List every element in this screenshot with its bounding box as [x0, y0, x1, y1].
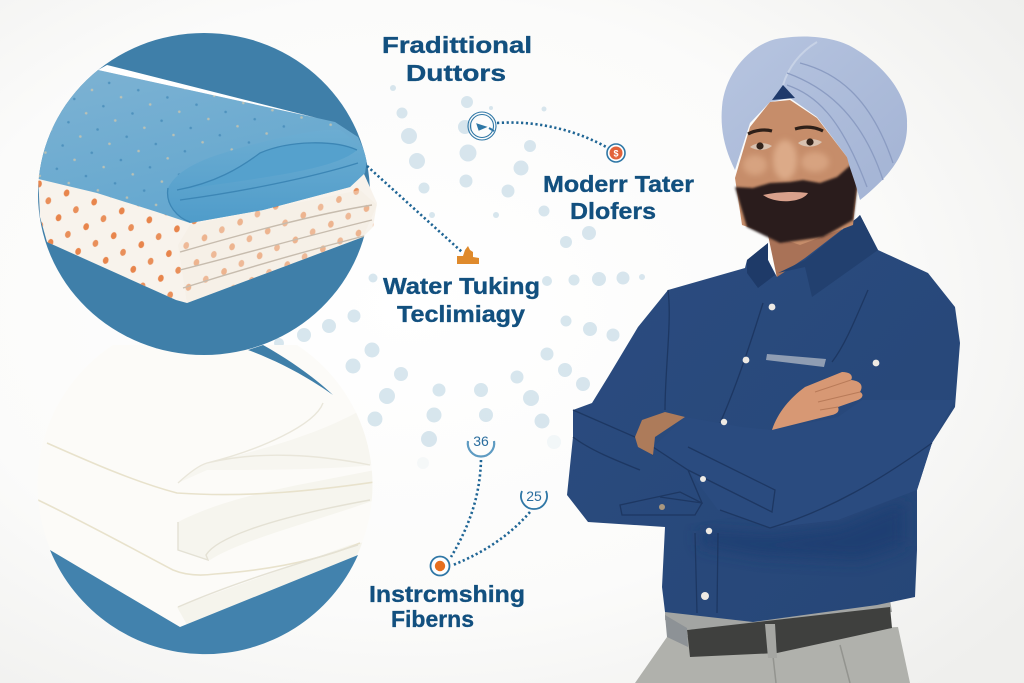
heading: Fradittional Duttors: Fradittional: [382, 32, 532, 58]
panel: top circle with folded blue and dotted fabrics: [30, 33, 377, 355]
icon: orange coin: [607, 144, 625, 162]
icon: orange fibre dot: [430, 556, 450, 576]
belt: [665, 600, 892, 658]
heading: Instrcmshing Fiberns: Instrcmshing: [369, 581, 525, 607]
heading: Instrcmshing Fiberns: [369, 581, 525, 632]
heading: Fradittional Duttors: Duttors: [406, 60, 506, 86]
heading: Fradittional Duttors: [382, 32, 532, 86]
icon: orange coin: $: [613, 148, 619, 158]
hand: left: [635, 412, 685, 455]
panel: bottom circle with folded white fabric: [30, 345, 380, 655]
blue folded towel: [30, 60, 367, 223]
gauge: 36: [468, 433, 494, 456]
white stripe above towel: [98, 65, 317, 118]
buttons: [659, 304, 879, 600]
heading: Water Tuking Teclimiagy: Teclimiagy: [397, 301, 525, 327]
blue arc under fabric: [50, 550, 358, 654]
collar right: [778, 215, 878, 297]
dotted white fabric: [38, 165, 377, 303]
trousers: [635, 627, 910, 683]
beard: [735, 163, 858, 243]
dark shadow below forearm: [704, 507, 900, 554]
forearm: [653, 400, 955, 528]
blue circle backdrop: [38, 33, 370, 355]
hand: right: [772, 372, 862, 430]
gauge: 25: 25: [526, 488, 542, 504]
heading: Water Tuking Teclimiagy: [383, 273, 540, 327]
heading: Moderr Tater Dlofers: [543, 171, 694, 224]
dotted connector from towel to orange icon: [367, 166, 462, 252]
neck: [768, 220, 845, 278]
smile: [763, 192, 808, 201]
turban: [722, 36, 907, 200]
dotted connector to coin icon: [497, 123, 608, 148]
heading: Instrcmshing Fiberns: Fiberns: [391, 606, 474, 632]
gauge: 36: 36: [473, 433, 489, 449]
pocket strip: [766, 354, 826, 367]
icon: orange factory: [457, 246, 479, 264]
heading: Moderr Tater Dlofers: Dlofers: [570, 198, 656, 224]
shirt: [567, 215, 960, 622]
icon: circular arrows: [468, 112, 496, 140]
blue wedge above fabric: [248, 345, 333, 395]
gauge: 25: [521, 488, 547, 509]
dotted water droplet background: [274, 85, 645, 469]
heading: Water Tuking Teclimiagy: Water Tuking: [383, 273, 540, 299]
collar left: [747, 243, 775, 288]
white fabric disc: [38, 345, 372, 624]
dotted connectors to fibre dot: [451, 460, 530, 565]
face: [735, 100, 858, 245]
heading: Moderr Tater Dlofers: Moderr Tater: [543, 171, 694, 197]
person: man in turban with crossed arms: [567, 36, 960, 683]
